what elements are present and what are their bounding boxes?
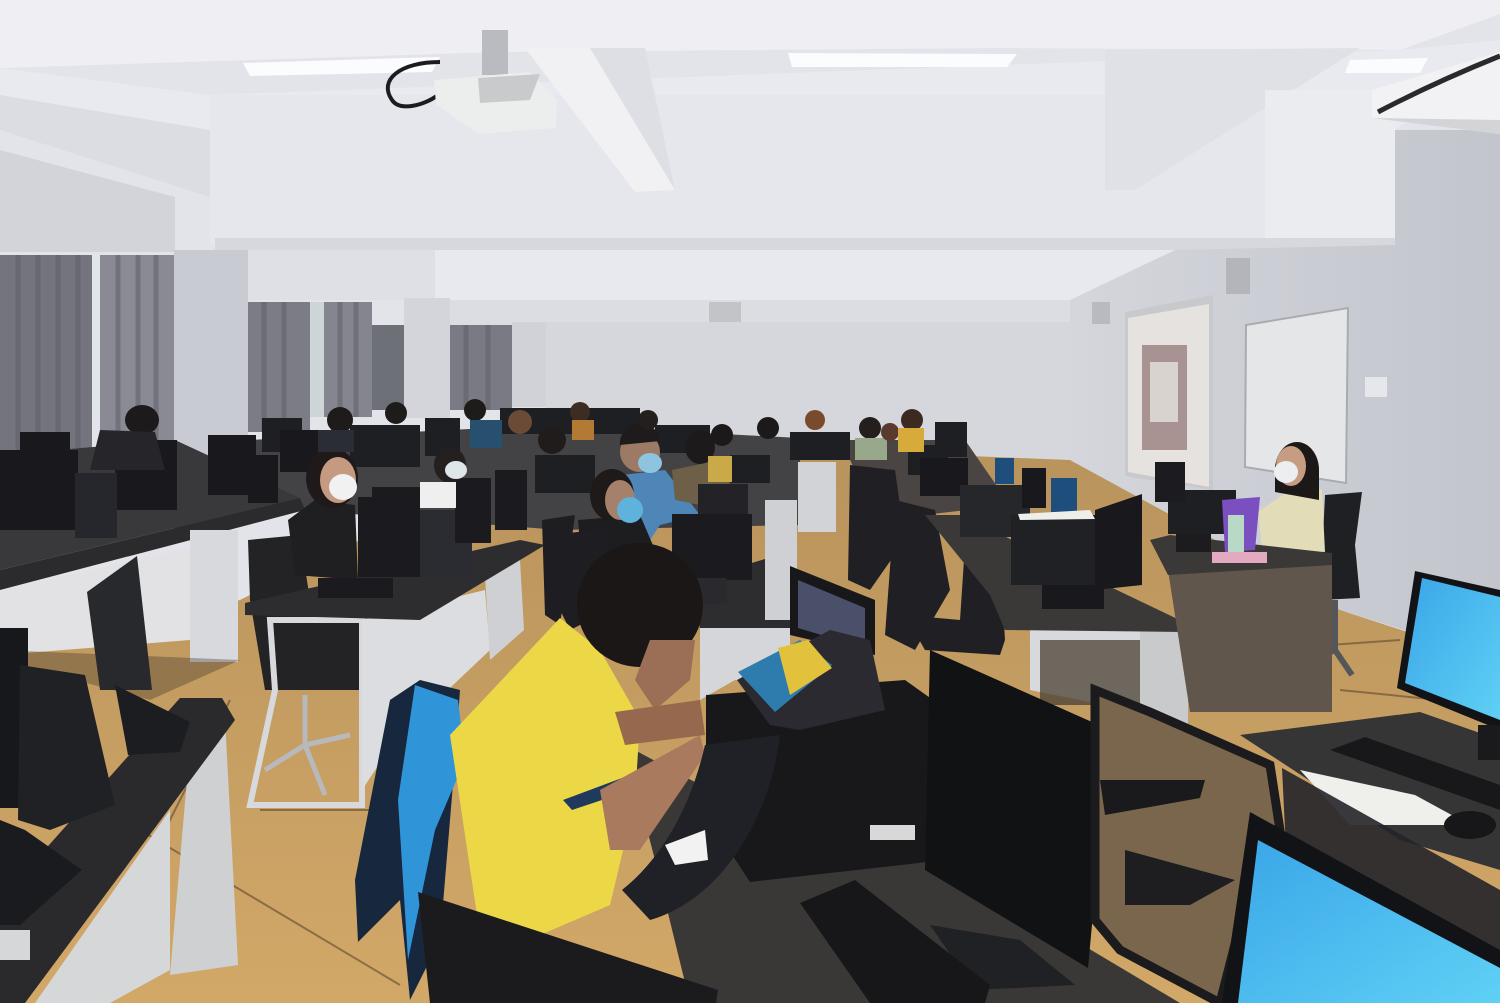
far-left foreground desk: [0, 556, 238, 1003]
jacket on chair: [355, 680, 465, 1000]
tower computer: [706, 680, 945, 882]
mesh chair right foreground: [1095, 690, 1280, 1003]
right desk row: [925, 515, 1190, 830]
woman in dark top with blue mask: [578, 469, 655, 600]
office chair beside striped woman: [248, 535, 360, 795]
centre desk row: [672, 462, 836, 700]
left desk row 2: [245, 540, 545, 805]
right row computers: [920, 458, 1142, 609]
projector screen: [1125, 295, 1213, 490]
person in back left: [90, 405, 165, 470]
messenger bag: [622, 630, 885, 920]
foreground chair behind man: [418, 892, 718, 1003]
foreground keyboard: [800, 880, 990, 1003]
centre chairs: [542, 515, 612, 630]
row 2 monitors and tower: [318, 470, 527, 598]
floor: [0, 440, 1500, 1003]
patterned-top woman: [672, 430, 730, 505]
large foreground monitor: [925, 650, 1110, 990]
man in yellow polo shirt: [450, 543, 705, 935]
woman in striped top with mask: [288, 448, 358, 580]
columns: [174, 250, 546, 490]
floor tile joints: [100, 640, 1440, 985]
instructor desk: [1150, 462, 1332, 712]
right desktop monitor: [1397, 571, 1500, 760]
left desk row 1: [0, 498, 305, 700]
instructor chair: [1312, 492, 1362, 675]
whiteboard: [1245, 308, 1348, 483]
ceiling projector, near: [388, 30, 557, 134]
back rows of computers: [262, 408, 967, 493]
instructor woman: [1258, 442, 1325, 552]
air conditioner: [1372, 52, 1500, 134]
left row monitors: [0, 430, 320, 538]
wall speakers and switches: [1092, 258, 1387, 397]
back computer rows zone: [0, 425, 1010, 570]
woman in white top: [420, 447, 467, 508]
back-row seated people: [318, 399, 924, 482]
window curtains: [0, 255, 512, 450]
main foreground desk: [625, 745, 1180, 1003]
small monitor on centre desk: [790, 566, 875, 655]
man in blue shirt with mask: [620, 423, 700, 540]
right row chairs: [848, 465, 1005, 655]
white paper on tower: [1018, 510, 1095, 520]
ceiling projector, far: [709, 302, 741, 322]
ceiling lights: [243, 53, 1428, 76]
right foreground desk: [1240, 712, 1500, 1003]
foreground monitor, bottom right: [1222, 812, 1500, 1003]
